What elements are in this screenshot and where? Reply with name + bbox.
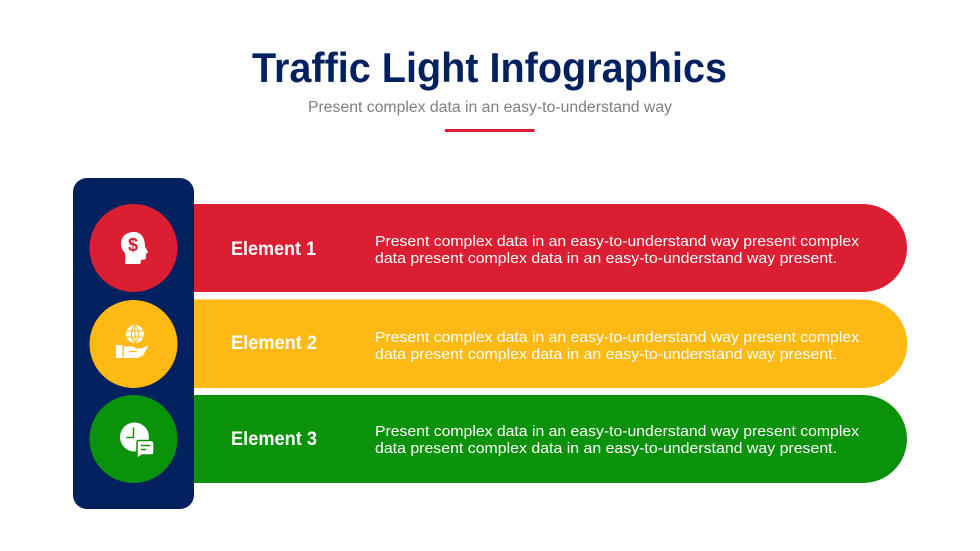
- label: element 1: Element 1: [231, 239, 316, 260]
- bar: element 2: [190, 300, 907, 388]
- icon: hand holding globe: [116, 325, 148, 358]
- description: element 2: Present complex data in an easy-to-understand way present complex: [375, 329, 860, 346]
- red light: [90, 204, 178, 292]
- traffic light housing: [73, 178, 194, 509]
- description: element 2: data present complex data in an easy-to-understand way present.: [375, 346, 837, 363]
- description: element 3: [375, 423, 860, 457]
- description: element 3: Present complex data in an easy-to-understand way present complex: [375, 423, 860, 440]
- description: element 1: Present complex data in an easy-to-understand way present complex: [375, 233, 860, 250]
- icon: clock with speech bubble: [120, 422, 154, 458]
- green light: [90, 395, 178, 483]
- description: element 2: [375, 329, 860, 363]
- bar: element 1: [190, 204, 907, 292]
- description: element 1: [375, 233, 860, 267]
- title: Traffic Light Infographics: [252, 44, 727, 91]
- icon: head with dollar sign: $: [128, 235, 138, 255]
- accent underline: [445, 129, 534, 132]
- label: element 3: Element 3: [231, 429, 317, 450]
- subtitle: Present complex data in an easy-to-understand way: [308, 99, 672, 116]
- label: element 2: Element 2: [231, 333, 317, 354]
- icon: head with dollar sign: [121, 232, 148, 264]
- bar: element 3: [190, 395, 907, 483]
- yellow light: [90, 300, 178, 388]
- description: element 1: data present complex data in an easy-to-understand way present.: [375, 250, 837, 267]
- description: element 3: data present complex data in an easy-to-understand way present.: [375, 440, 837, 457]
